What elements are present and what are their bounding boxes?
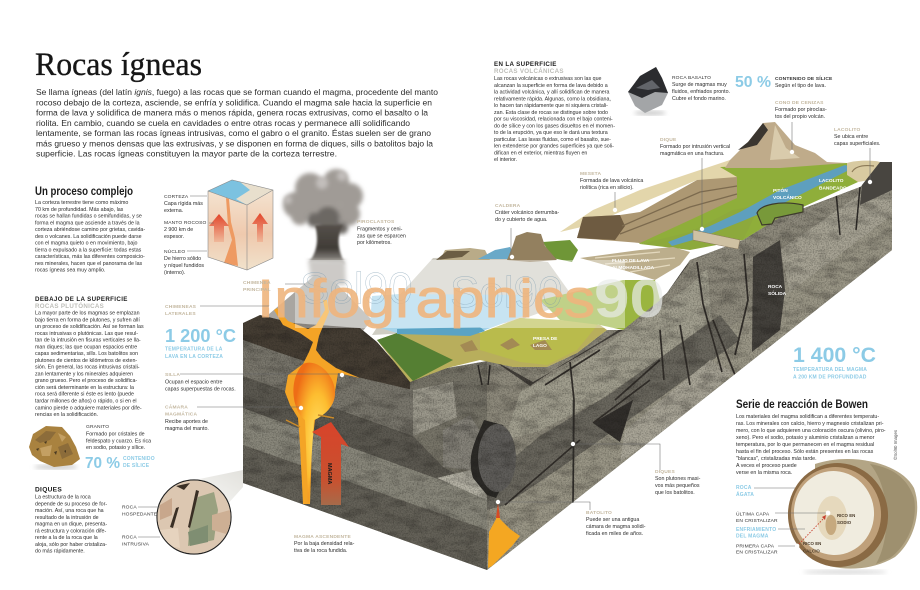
icon: magma arrow: MAGMA: [326, 463, 332, 484]
icon: earth cube: [208, 180, 273, 270]
labels: volcano left column: Ocupan el espacio entre: [165, 380, 222, 386]
stat: 1 400 C: TEMPERATURA DEL MAGMA: [793, 367, 867, 373]
panel: diques: aloja, sólo por haber cristaliza-: [35, 542, 107, 548]
volcanic plug: [757, 203, 803, 225]
illustration: ash cloud: [283, 169, 363, 285]
panel: serie de reaccion de bowen: temperatura, por lo que permanecen en el magma residual: [736, 442, 874, 448]
labels: earth layers: externa.: [164, 208, 183, 214]
panel: debajo de la superficie: ción será determinante en la estructura: la: [35, 385, 134, 391]
panel: debajo de la superficie: camino pierde o adquiere materiales por dife-: [35, 405, 142, 411]
caldera: [440, 248, 490, 260]
labels: inside terrain: PRESA DE: [533, 337, 557, 342]
labels: below block: que los batolitos.: [655, 490, 695, 496]
notch blocks: [413, 382, 457, 436]
labels: below block: Por la baja densidad rela-: [294, 541, 354, 547]
labels: below block: DIQUES: [655, 469, 675, 475]
panel: diques: resultado de la intrusión de: [35, 515, 99, 521]
labels: volcano left column: SILLA: [165, 372, 180, 378]
panel: debajo de la superficie: roca será diferente si éste es lento (puede: [35, 392, 134, 398]
icon: agate rock: RICO EN: [837, 513, 855, 518]
labels: below block: Puede ser una antigua: [586, 517, 639, 523]
panel: un proceso complejo: con el magma quieto o en movimiento, bajo: [35, 241, 138, 247]
labels: earth layers: De hierro sólido: [164, 256, 201, 262]
labels: surface features: do y cubierto de agua.: [495, 217, 547, 223]
labels: below block: MAGMA ASCENDENTE: [294, 534, 351, 540]
stat: 1 400 C: [793, 344, 876, 380]
intro text: Se llama ígneas (del latín ignis, fuego) a las rocas que se forman cuando el magma, procedente del manto: [36, 87, 438, 97]
labels: inside terrain: ALMOHADILLADA: [612, 265, 655, 271]
intro text: lentamente, se forman las rocas ígneas intrusivas, como el gabro o el granito. Éstas suelen ser de grano: [36, 128, 431, 138]
labels: inside terrain: LACOLITO: [819, 179, 843, 184]
labels: surface features: magmática en una fractura.: [660, 151, 724, 157]
labels: agate rock: PRIMERA CAPA: [736, 544, 774, 550]
labels: inside terrain: VOLCÁNICO: [773, 194, 802, 201]
panel: debajo de la superficie: plutones de cientos de kilómetros de exten-: [35, 358, 137, 364]
panel: serie de reaccion de bowen: Serie de reacción de Bowen: [736, 399, 868, 411]
labels: agate rock: ROCA: [736, 485, 752, 491]
labels: agate rock: ÁGATA: [736, 491, 754, 498]
panel: en la superficie: por su viscosidad, relacionada con el bajo conteni-: [494, 117, 613, 123]
labels: surface features: Formado por piroclas-: [775, 107, 827, 113]
labels: inside terrain: PITÓN: [773, 189, 788, 194]
labels: earth layers: NÚCLEO: [164, 248, 185, 255]
label: roca basalto: fluidos, enfriados pronto.: [672, 89, 730, 95]
panel: debajo de la superficie: capas sedimentarias, sills. Los batolitos son: [35, 351, 138, 357]
panel: en la superficie: to de la erupción, ya que eso le dará una textura: [494, 130, 608, 136]
labels: volcano left column: capas superpuestas de rocas.: [165, 386, 236, 392]
panel: serie de reaccion de bowen: "blancas", cristalizadas más tarde.: [736, 456, 817, 462]
panel: debajo de la superficie: bajo tierra en forma de plutones, y sufren allí: [35, 317, 140, 323]
labels: earth layers: espesor.: [164, 234, 184, 240]
panel: diques: rente a la de la roca que la: [35, 535, 98, 541]
labels: surface features: CONO DE CENIZAS: [775, 100, 824, 106]
green plain and river: [637, 163, 858, 244]
title: Rocas ígneas: [35, 47, 202, 83]
panel: un proceso complejo: 70 km de profundidad. Más abajo, las: [35, 207, 124, 213]
panel: debajo de la superficie: ROCAS PLUTÓNICAS: [35, 302, 104, 310]
panel: en la superficie: len extenderse por grandes superficies ya que soli-: [494, 144, 614, 150]
labels: surface features: Formado por intrusión vertical: [660, 144, 730, 150]
dike wall: [577, 177, 737, 243]
labels: surface features: Formada de lava volcánica: [580, 178, 643, 184]
labels: earth layers: CORTEZA: [164, 194, 189, 200]
stat: 70 % silice: 70 %: [85, 455, 120, 472]
labels: dike rock: INTRUSIVA: [122, 542, 150, 548]
leaders and points on block: [180, 122, 872, 510]
labels: volcano left column: Recibe aportes de: [165, 419, 208, 425]
label: roca basalto: [672, 75, 730, 102]
volcano cone: [262, 275, 372, 332]
labels: earth layers: 2 900 km de: [164, 227, 193, 233]
labels: surface features: [495, 100, 881, 223]
intro text: [36, 87, 438, 158]
labels: below block: vos más pequeños: [655, 483, 700, 489]
labels: volcano left column: CHIMENEA: [243, 281, 271, 286]
panel: en la superficie: zan. Esta clase de rocas se distingue sobre todo: [494, 110, 608, 116]
labels: inside terrain: SÓLIDA: [768, 289, 787, 297]
labels: earth layers: MANTO ROCOSO: [164, 220, 207, 226]
labels: dike rock: [122, 504, 160, 548]
icon: agate rock: SODIO: [837, 520, 852, 525]
stat: 50 % silice: 50 %: [735, 74, 771, 91]
text: granito: feldespato y cuarzo. Es rica: [86, 438, 151, 444]
icon: basalt rock: [628, 67, 668, 116]
panel: serie de reaccion de bowen: verse en la misma roca.: [736, 470, 792, 476]
stat: 1 400 C: 1 400 °C: [793, 344, 876, 367]
right face: [487, 162, 892, 570]
labels: earth layers: [164, 194, 214, 276]
panel: un proceso complejo: tierra o expulsado a la superficie: todas estas: [35, 247, 142, 253]
watermark: translucent band: Infographics: [257, 269, 595, 329]
labels: below block: [294, 469, 701, 554]
labels: volcano left column: PRINCIPAL: [243, 287, 271, 293]
panel: un proceso complejo: [35, 186, 145, 274]
labels: earth layers: Capa rígida más: [164, 201, 203, 207]
panel: debajo de la superficie: [35, 296, 144, 418]
stat: 70 % silice: DE SÍLICE: [123, 461, 150, 469]
lava flow plain: [580, 247, 690, 280]
labels: dike rock: ROCA: [122, 506, 137, 510]
panel: serie de reaccion de bowen: ras. Los minerales con calcio, hierro y magnesio cristalizan pri-: [736, 421, 884, 427]
block side faces: [243, 162, 892, 570]
panel: diques: rá estructura y coloración dife-: [35, 528, 106, 534]
panel: diques: magma en un dique, presenta-: [35, 522, 107, 528]
panel: debajo de la superficie: man diques; las que ocupan espacios entre: [35, 344, 137, 350]
labels: surface features: DIQUE: [660, 137, 677, 143]
labels: dike rock: HOSPEDANTE: [122, 512, 158, 518]
panel: serie de reaccion de bowen: A veces el proceso puede: [736, 463, 797, 469]
intro text: rocoso debajo de la corteza, asciende, se enfría y solidifica. Cuando el magma sale hacia la superficie en: [36, 97, 432, 107]
icon: magma arrow: [312, 422, 349, 505]
labels: agate rock: DEL MAGMA: [736, 534, 769, 540]
labels: volcano left column: CÁMARA: [165, 406, 188, 410]
icon: granite rock: [29, 426, 80, 470]
panel: serie de reaccion de bowen: [736, 399, 886, 476]
labels: inside terrain: BANDEADO: [819, 186, 847, 192]
panel: en la superficie: alcanzan la superficie en forma de lava debido a: [494, 83, 608, 89]
labels: inside terrain: [533, 178, 847, 349]
stat: 50 % silice: Según el tipo de lava.: [775, 83, 826, 89]
label: piroclastos: Fragmentos y ceni-: [357, 226, 402, 232]
label: roca basalto: Surge de magmas muy: [672, 82, 727, 88]
watermark: translucent band: Sol90: [300, 264, 413, 313]
stat: 1 200 C: 1 200 °C: [165, 326, 236, 346]
panel: en la superficie: el interior.: [494, 157, 517, 163]
panel: un proceso complejo: rocas se hallan fundidas o semifundidas, y se: [35, 214, 142, 220]
labels: agate rock: ENFRIAMIENTO: [736, 527, 776, 533]
batholith: [470, 420, 504, 498]
panel: en la superficie: EN LA SUPERFICIE: [494, 61, 557, 68]
panel: diques: do más rápidamente.: [35, 549, 85, 555]
label: piroclastos: [357, 219, 406, 246]
panel: diques: La estructura de la roca: [35, 494, 91, 500]
panel: un proceso complejo: des o volcanes. La solidificación puede darse: [35, 234, 142, 240]
panel: debajo de la superficie: tan de la intrusión en fisuras verticales se lla-: [35, 338, 141, 344]
text: granito: GRANITO: [86, 424, 109, 430]
stat: 70 % silice: [85, 455, 155, 472]
panel: debajo de la superficie: zan lentamente y los minerales adquieren: [35, 371, 133, 377]
panel: un proceso complejo: características, más las diferentes composicio-: [35, 254, 145, 260]
stat: 50 % silice: CONTENIDO DE SÍLICE: [775, 74, 833, 82]
labels: inside terrain: LAGO: [533, 343, 547, 349]
panel: debajo de la superficie: grano grueso. Pero el proceso de solidifica-: [35, 378, 137, 384]
intro text: superficie. Las rocas ígneas constituyen la mayor parte de la corteza terrestre.: [36, 148, 337, 158]
panel: un proceso complejo: forma el magma que asciende a través de la: [35, 220, 140, 226]
labels: agate rock: EN CRISTALIZAR: [736, 550, 778, 556]
magnifier wedge: [180, 470, 243, 506]
panel: un proceso complejo: rocas ígneas sea muy amplio.: [35, 268, 105, 274]
left layers: [243, 315, 410, 390]
icon: agate rock: CALCIO: [803, 548, 820, 554]
panel: debajo de la superficie: La mayor parte de los magmas se emplazan: [35, 310, 140, 316]
text: granito: en sodio, potasio y sílice.: [86, 445, 145, 451]
panel: debajo de la superficie: sión. En general, las rocas intrusivas cristali-: [35, 365, 140, 371]
labels: surface features: Cráter volcánico derrumba-: [495, 210, 559, 216]
labels: volcano left column: LATERALES: [165, 311, 196, 317]
labels: agate rock: EN CRISTALIZAR: [736, 518, 778, 524]
stat: 1 400 C: A 200 KM DE PROFUNDIDAD: [793, 374, 867, 380]
label: piroclastos: PIROCLASTOS: [357, 219, 395, 225]
figure: dike magnified: [157, 480, 231, 554]
stone slab: [693, 230, 740, 249]
watermark: translucent band: [257, 260, 665, 329]
panel: en la superficie: difican en el exterior, mientras fluyen en: [494, 150, 587, 156]
panel: serie de reaccion de bowen: Los materiales del magma solidifican a diferentes temperatu-: [736, 414, 879, 420]
panel: en la superficie: Las rocas volcánicas o extrusivas son las que: [494, 76, 601, 82]
fissures: [505, 254, 748, 505]
labels: below block: tiva de la roca fundida.: [294, 548, 347, 554]
caldera mountain: [372, 256, 575, 335]
rock texture: [243, 160, 893, 572]
labels: surface features: MESETA: [580, 171, 601, 177]
panel: en la superficie: do de sílice y con los gases disueltos en el momen-: [494, 123, 615, 129]
label: roca basalto: ROCA BASALTO: [672, 75, 711, 81]
label: roca basalto: Cubre el fondo marino.: [672, 96, 726, 102]
text: granito: [86, 424, 151, 451]
intro text: riolita. En cambio, cuando se cuela en cavidades o entre otras rocas y permanece allí solidificando: [36, 118, 410, 128]
labels: volcano left column: [165, 280, 271, 432]
labels: surface features: capas superficiales.: [834, 141, 881, 147]
panel: debajo de la superficie: DEBAJO DE LA SUPERFICIE: [35, 296, 128, 303]
lake: [370, 294, 525, 333]
labels: earth layers: y níquel fundidos: [164, 263, 204, 269]
labels: below block: Son plutones masi-: [655, 476, 700, 482]
panel: serie de reaccion de bowen: mero, con lo que adquieren una coloración oscura (olivino, piro-: [736, 428, 886, 434]
panel: serie de reaccion de bowen: hasta el fin del proceso. Sólo están presentes en las rocas: [736, 449, 874, 455]
intro text: más grueso y menos densas que las extrusivas, y se disponen en forma de diques, sills o batolitos bajo la: [36, 138, 433, 148]
labels: volcano left column: CHIMENEAS: [165, 305, 196, 310]
credit: ©Sol90 Images: [893, 429, 898, 460]
plateau: [560, 160, 745, 232]
labels: volcano left column: magma del manto.: [165, 426, 209, 432]
panel: en la superficie: ROCAS VOLCÁNICAS: [494, 68, 564, 75]
panel: en la superficie: particular. Las lavas fluidas, como el basalto, sue-: [494, 137, 611, 143]
panel: un proceso complejo: nes minerales, hacen que el panorama de las: [35, 261, 143, 267]
panel: debajo de la superficie: un proceso de solidificación. Así se forman las: [35, 324, 144, 330]
labels: surface features: LACOLITO: [834, 127, 861, 133]
stat: 1 200 C: TEMPERATURA DE LA: [165, 346, 223, 352]
intro text: forma de lava y solidifica de manera más o menos rápida, genera rocas extrusivas, como el basalto o la: [36, 108, 428, 118]
stat: 50 % silice: [735, 74, 833, 91]
panel: diques: mación. Así, una roca que ha: [35, 508, 104, 514]
panel: un proceso complejo: corteza abriéndose camino por grietas, cavida-: [35, 227, 145, 233]
panel: en la superficie: la actividad volcánica, y allí solidifican de manera: [494, 90, 609, 96]
labels: agate rock: ÚLTIMA CAPA: [736, 512, 769, 518]
text: granito: Formado por cristales de: [86, 432, 145, 438]
icon: agate rock: [781, 457, 917, 574]
panel: debajo de la superficie: rencias en la solidificación.: [35, 412, 98, 418]
panel: en la superficie: relativamente rápida. Algunas, como la obsidiana,: [494, 96, 611, 102]
labels: agate rock: [736, 485, 826, 556]
labels: inside terrain: ROCA: [768, 285, 782, 290]
illustration: terrain block: [243, 122, 893, 572]
labels: surface features: CALDERA: [495, 203, 521, 209]
panel: debajo de la superficie: tardar millones de años) o rápido, o si en el: [35, 399, 137, 405]
panel: un proceso complejo: Un proceso complejo: [35, 186, 133, 198]
stat: 1 200 C: [165, 326, 236, 360]
label: piroclastos: zas que se esparcen: [357, 233, 406, 239]
labels: surface features: Se ubica entre: [834, 134, 868, 140]
labels: below block: ficada en miles de años.: [586, 531, 643, 537]
green slope and shore: [377, 318, 607, 382]
icon: agate rock: RICO EN: [803, 541, 821, 546]
label: piroclastos: por kilómetros.: [357, 240, 392, 246]
labels: surface features: riolítica (rica en silicio).: [580, 185, 634, 191]
panel: un proceso complejo: La corteza terrestre tiene como máximo: [35, 200, 128, 206]
labels: earth layers: (interno).: [164, 270, 185, 276]
panel: serie de reaccion de bowen: xeno). Pero el sodio, potasio y aluminio cristalizan a menor: [736, 435, 875, 441]
panel: debajo de la superficie: rocas intrusivas o plutónicas. Las que resul-: [35, 331, 138, 337]
labels: inside terrain: FLUJO DE LAVA: [612, 259, 649, 264]
panel: en la superficie: lo hacen tan rápidamente que ni siquiera cristali-: [494, 103, 608, 109]
labels: below block: cámara de magma solidi-: [586, 524, 646, 530]
watermark: translucent band: Sol90: [450, 268, 563, 317]
labels: volcano left column: MAGMÁTICA: [165, 410, 197, 418]
panel: en la superficie: [494, 61, 615, 163]
illustration: magma chamber and conduits: [274, 300, 520, 568]
laccolith: [847, 161, 880, 182]
panel: diques: [35, 486, 107, 555]
panel: diques: DIQUES: [35, 486, 62, 494]
labels: below block: BATOLITO: [586, 510, 612, 516]
stat: 1 200 C: LAVA EN LA CORTEZA: [165, 354, 223, 360]
ash cone mountain: [725, 122, 847, 168]
labels: surface features: tos del propio volcán.: [775, 114, 825, 120]
watermark: translucent band: 90: [594, 269, 665, 329]
panel: diques: depende de su proceso de for-: [35, 501, 107, 507]
stat: 70 % silice: CONTENIDO: [123, 456, 155, 462]
labels: dike rock: ROCA: [122, 536, 137, 540]
